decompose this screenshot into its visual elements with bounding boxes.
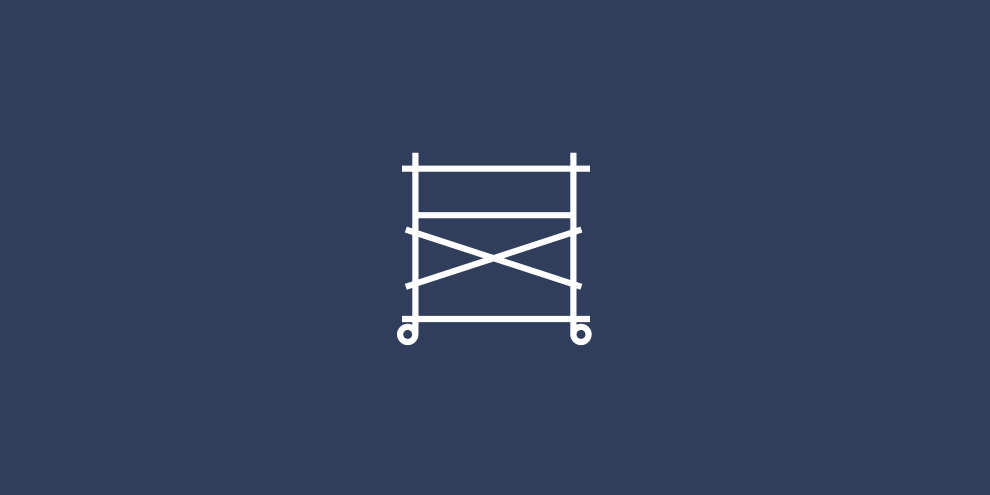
right wheel bbox=[573, 327, 589, 342]
cross brace: ascending bbox=[406, 230, 581, 287]
left wheel bbox=[400, 327, 415, 342]
middle rail bbox=[416, 212, 573, 218]
icon: mobile scaffold tower bbox=[400, 153, 590, 342]
left upright bbox=[412, 153, 418, 334]
cross brace: descending bbox=[406, 230, 581, 287]
bottom rail bbox=[402, 316, 590, 322]
top rail bbox=[402, 166, 590, 172]
right upright bbox=[570, 153, 577, 334]
